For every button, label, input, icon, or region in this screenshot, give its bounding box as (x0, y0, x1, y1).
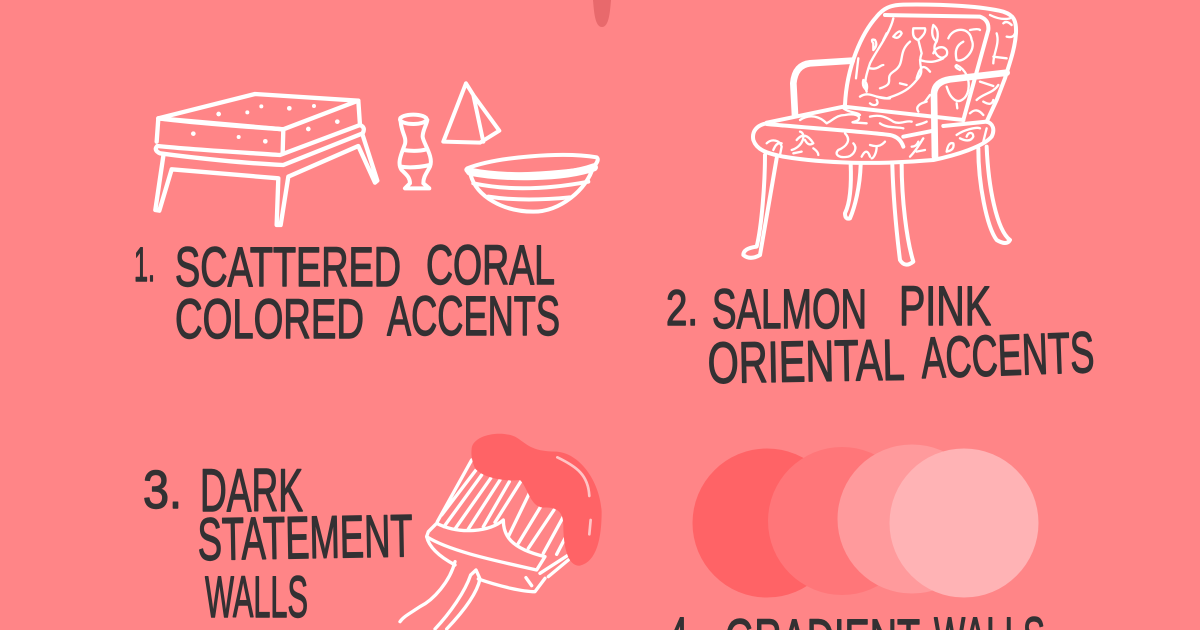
heading: item 3: STATEMENT (197, 502, 413, 573)
heading: item 3: DARK (200, 457, 303, 524)
paint blob (471, 434, 602, 566)
heading: item 2: 2. (666, 280, 698, 336)
icon: patterned armchair (743, 5, 1016, 265)
heading: item 1: CORAL (426, 233, 555, 296)
swatch circles (692, 444, 1038, 598)
panel: scattered coral accents (134, 83, 598, 350)
heading: item 2: SALMON (712, 277, 867, 340)
heading: item 2: ORIENTAL (707, 328, 905, 396)
icon: pyramid (443, 83, 499, 143)
heading: item 2: ACCENTS (920, 320, 1095, 391)
heading: item 1: COLORED (175, 287, 364, 350)
icon: paint brush (400, 434, 602, 629)
paint drip at top edge (593, 0, 611, 27)
heading: item 2: PINK (899, 274, 991, 337)
pattern: floral vines (767, 15, 1015, 158)
panel: gradient walls (668, 444, 1045, 630)
heading: item 1: 1. (134, 239, 155, 292)
heading: item 1 (134, 233, 560, 350)
heading: item 3: WALLS (205, 565, 308, 630)
icon: bowl (466, 155, 598, 212)
heading: item 1: SCATTERED (175, 235, 401, 298)
heading: item 2 (666, 274, 1095, 396)
heading: item 3 (143, 457, 413, 630)
heading: item 3: 3. (143, 460, 182, 520)
panel: salmon pink oriental accents (666, 5, 1095, 396)
heading: item 1: ACCENTS (387, 284, 560, 347)
icon: vase (400, 115, 431, 188)
icon: ottoman (155, 94, 377, 225)
panel: dark statement walls (143, 434, 602, 630)
